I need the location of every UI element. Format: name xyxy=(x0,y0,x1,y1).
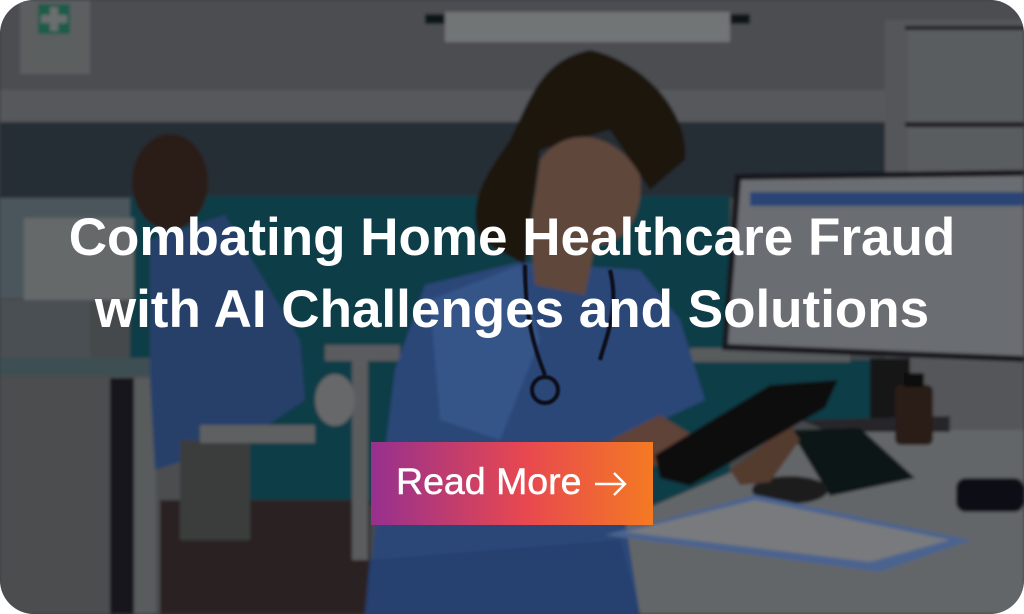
title: with AI Challenges and Solutions xyxy=(95,280,929,339)
hand and tablet xyxy=(610,415,700,475)
back nurse xyxy=(132,134,208,230)
hair xyxy=(475,50,685,265)
monitor xyxy=(722,170,1024,362)
button label: Read More xyxy=(396,460,582,502)
title: Combating Home Healthcare Fraud xyxy=(69,208,955,267)
right object xyxy=(956,478,1024,512)
desk right xyxy=(620,430,1024,614)
read more button xyxy=(371,442,653,525)
main nurse body xyxy=(365,262,705,614)
icon: arrow xyxy=(595,472,627,496)
papers xyxy=(605,495,972,572)
title xyxy=(69,208,955,339)
keyboard xyxy=(790,428,915,496)
mouse xyxy=(752,476,828,504)
face and neck xyxy=(530,137,641,295)
fixtures xyxy=(445,12,730,42)
bottle xyxy=(895,385,933,445)
stethoscope xyxy=(525,265,613,403)
